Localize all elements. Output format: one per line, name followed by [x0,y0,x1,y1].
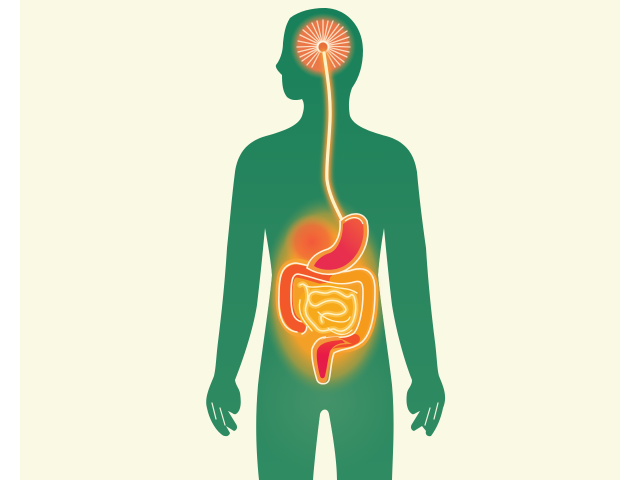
abdomen glow [266,199,384,391]
large intestine [279,263,375,353]
small intestine [297,283,357,334]
finger gaps [212,403,438,425]
stomach [307,214,368,274]
rectum [312,337,352,384]
vagus nerve [324,53,342,220]
brain with radiating nerves [290,13,356,79]
body silhouette [200,0,450,480]
